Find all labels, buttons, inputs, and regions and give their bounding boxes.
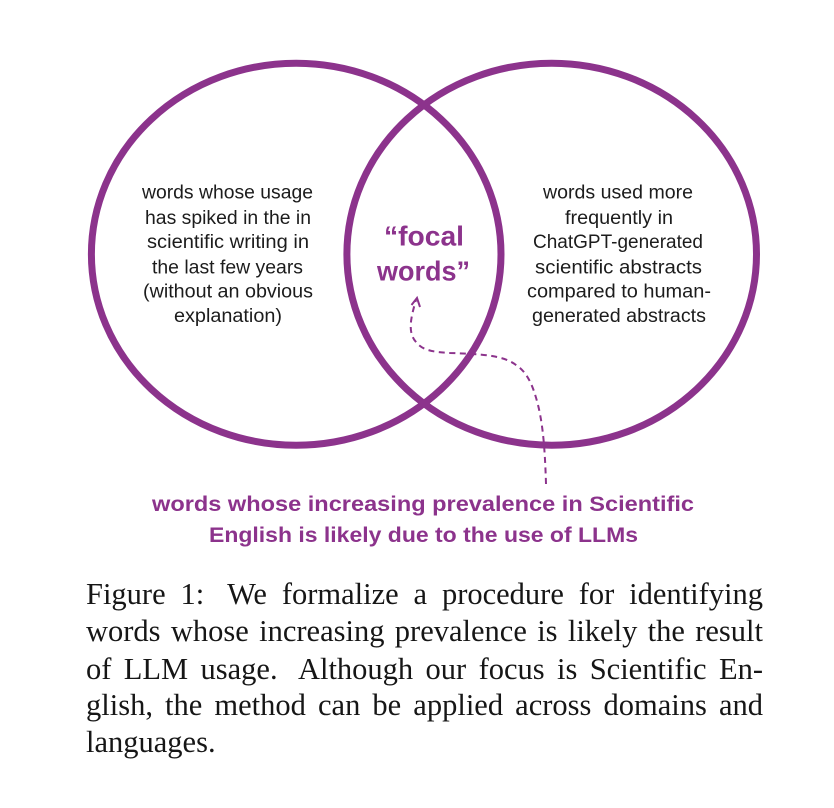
right circle text: ChatGPT-generated bbox=[533, 232, 703, 253]
left circle text: the last few years bbox=[152, 258, 303, 278]
right circle text: generated abstracts bbox=[532, 306, 706, 327]
venn diagram bbox=[88, 60, 760, 547]
left circle text: scientific writing in bbox=[147, 232, 309, 253]
left circle text: explanation) bbox=[174, 306, 282, 327]
right circle text bbox=[527, 182, 711, 327]
figure caption: glish, the method can be applied across domains and bbox=[86, 688, 763, 722]
left circle text: has spiked in the in bbox=[145, 208, 311, 229]
bottom callout: English is likely due to the use of LLMs bbox=[209, 523, 638, 547]
right circle text: frequently in bbox=[565, 208, 673, 229]
focal words label bbox=[376, 220, 470, 286]
focal words label: words” bbox=[376, 256, 470, 286]
bottom callout bbox=[151, 492, 694, 547]
focal words label: “focal bbox=[384, 220, 464, 252]
left circle text: (without an obvious bbox=[143, 282, 313, 302]
left circle bbox=[91, 63, 501, 445]
left circle text: words whose usage bbox=[141, 182, 313, 204]
right circle text: words used more bbox=[542, 182, 693, 204]
figure caption: Figure 1: We formalize a procedure for identifying bbox=[86, 577, 763, 611]
right circle text: compared to human- bbox=[527, 282, 711, 302]
figure caption: of LLM usage. Although our focus is Scientific En- bbox=[86, 652, 763, 686]
figure caption: languages. bbox=[86, 725, 216, 759]
right circle bbox=[347, 63, 756, 445]
figure caption: words whose increasing prevalence is likely the result bbox=[86, 614, 763, 648]
right circle text: scientific abstracts bbox=[535, 258, 702, 278]
bottom callout: words whose increasing prevalence in Scientific bbox=[151, 492, 694, 516]
dashed arrow bbox=[411, 298, 546, 484]
left circle text bbox=[141, 182, 313, 327]
